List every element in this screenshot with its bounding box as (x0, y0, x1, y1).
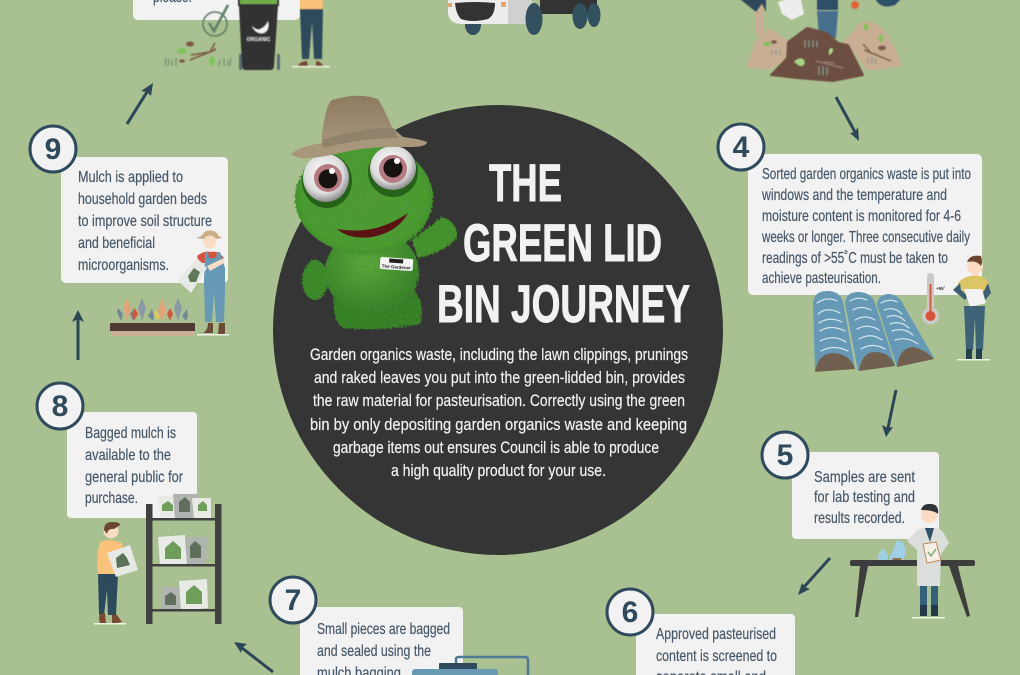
icon: person holding mulch bag (94, 522, 138, 624)
step 8 number (37, 383, 83, 429)
step 6 card: Approved pasteurised (656, 626, 776, 643)
title: THE (489, 154, 562, 213)
step 6 card (636, 614, 795, 675)
step 6 number (607, 589, 653, 635)
step 9 number: 9 (45, 133, 61, 166)
title: BIN JOURNEY (437, 275, 690, 334)
bagging machine (412, 657, 528, 675)
step 8 card (67, 412, 197, 518)
step 5 card: results recorded. (814, 510, 905, 527)
title (437, 154, 690, 334)
icon: compost piles with worker (735, 0, 905, 81)
step 4 card: windows and the temperature and (761, 187, 947, 204)
step 4 card (748, 154, 982, 295)
intro paragraph: the raw material for pasteurisation. Correctly using the green (313, 391, 685, 410)
step 4 number: 4 (733, 131, 750, 164)
arrow: step 3 to 4 (836, 97, 859, 141)
step 9 card: household garden beds (78, 191, 207, 208)
icon: composting windrows (813, 291, 934, 372)
step 9 card: and beneficial (78, 235, 155, 252)
panel: central dark circle (273, 105, 723, 555)
step 4 card: achieve pasteurisation. (762, 270, 881, 287)
step 9 card: to improve soil structure (78, 213, 212, 230)
icon: worker with clipboard (953, 256, 991, 360)
intro paragraph (310, 345, 688, 480)
name badge: The Gardener (382, 264, 411, 271)
step 4 card: moisture content is monitored for 4-6 (762, 208, 961, 225)
step 4 number (718, 124, 764, 170)
arrow: step 5 to 6 (798, 558, 830, 595)
mascot: green gardener with hat (291, 96, 457, 329)
step 8 card: general public for (85, 469, 184, 486)
intro paragraph: garbage items out ensures Council is able to produce (333, 438, 659, 457)
step 5 card: Samples are sent (814, 469, 915, 486)
step 7 number (270, 577, 316, 623)
step 5 card (792, 452, 939, 539)
arrow: step 4 to 5 (882, 390, 896, 437)
step 6 card: content is screened to (656, 648, 777, 665)
step 5 number: 5 (777, 439, 793, 472)
name badge (380, 257, 413, 271)
top-left card (133, 0, 300, 20)
intro paragraph: a high quality product for your use. (391, 461, 606, 480)
intro paragraph: and raked leaves you put into the green-lidded bin, provides (314, 368, 685, 387)
step 5 card: for lab testing and (814, 489, 915, 506)
arrow: step 9 to 1 (127, 83, 153, 124)
icon: raised planter with plants (110, 298, 195, 336)
intro paragraph: Garden organics waste, including the lawn clippings, prunings (310, 345, 688, 364)
title: GREEN LID (463, 214, 662, 273)
icon: lab table with scientist (850, 504, 975, 618)
icon: collection truck (448, 0, 600, 35)
step 8 card: available to the (85, 447, 171, 464)
step 8 card: purchase. (85, 490, 138, 507)
icon: green bin with person and garden waste: ORGANIC (247, 37, 271, 43)
step 9 card (61, 157, 228, 283)
arrow: step 8 to 9 (72, 310, 84, 360)
step 7 card: and sealed using the (317, 643, 431, 660)
icon: thermometer (922, 273, 946, 324)
step 7 number: 7 (285, 584, 301, 617)
step 8 number: 8 (52, 390, 68, 423)
icon: thermometer: +55˚ (936, 285, 946, 291)
icon: shelving with mulch bags (146, 494, 222, 624)
icon: farmer spreading mulch (178, 230, 229, 336)
arrow: step 7 to 8 (234, 642, 273, 672)
step 6 number: 6 (622, 596, 638, 629)
step 9 number (30, 126, 76, 172)
step 9 card: Mulch is applied to (78, 169, 183, 186)
step 9 card: microorganisms. (78, 257, 169, 274)
step 5 number (762, 432, 808, 478)
step 4 card: readings of >55˚C must be taken to (762, 250, 948, 267)
step 7 card: Small pieces are bagged (317, 621, 450, 638)
icon: green bin with person and garden waste (165, 0, 330, 70)
step 8 card: Bagged mulch is (85, 425, 176, 442)
intro paragraph: bin by only depositing garden organics waste and keeping (310, 415, 687, 434)
step 7 card (300, 607, 463, 675)
